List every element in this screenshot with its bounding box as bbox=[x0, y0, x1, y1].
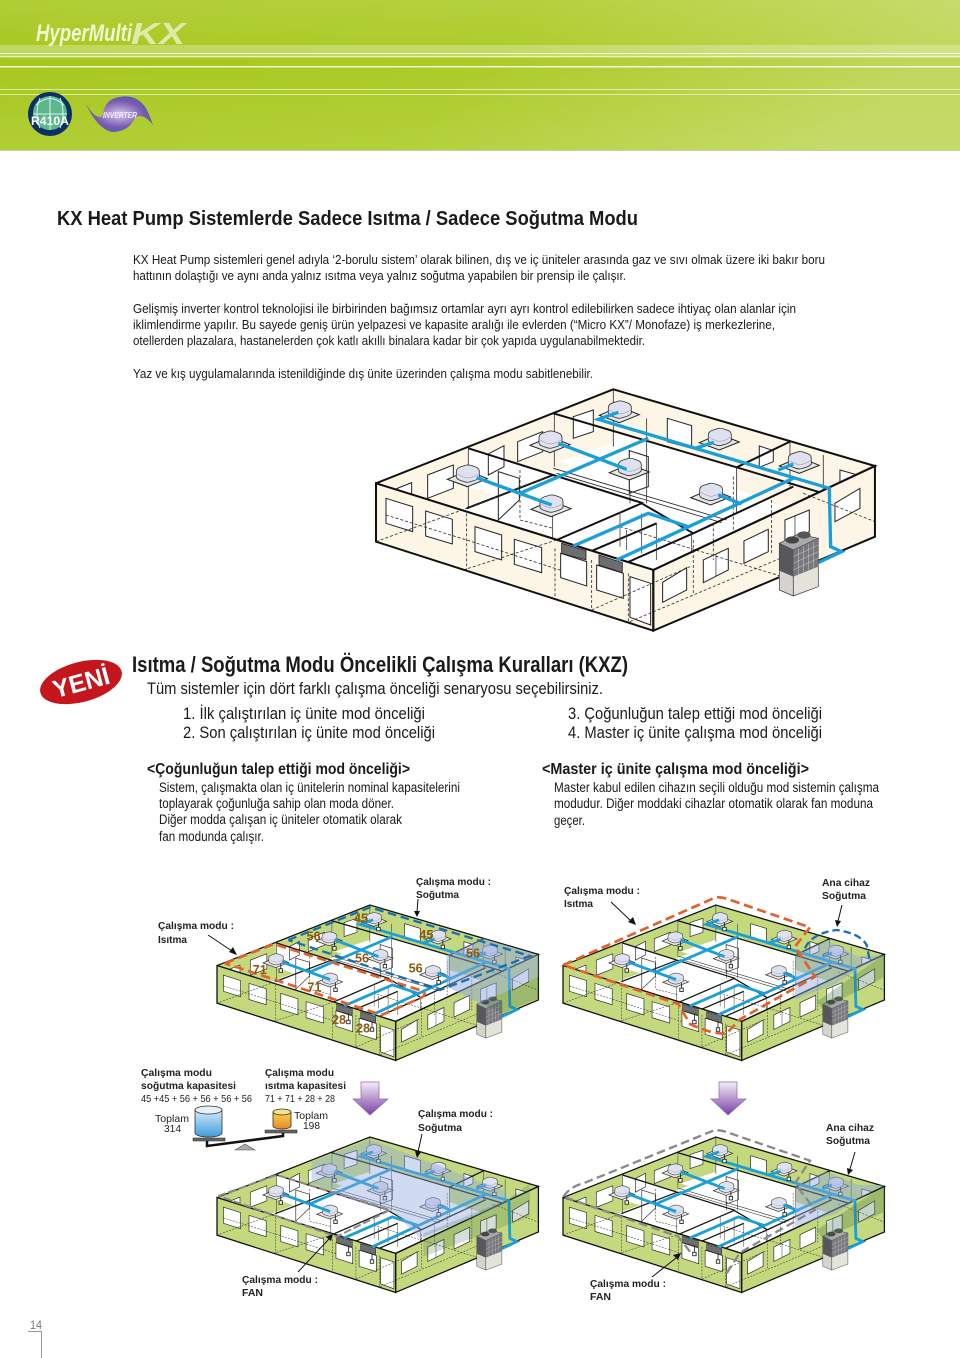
label: cooling mode top: Soğutma bbox=[416, 889, 459, 901]
text block: majority priority: toplayarak çoğunluğa sahip olan moda döner. bbox=[159, 796, 394, 811]
intro text: otellerden plazalara, hastanelerden çok katlı akıllı binalara kadar bir çok yapıda uygulanabilmektedir. bbox=[133, 333, 645, 348]
intro text: Yaz ve kış uygulamalarında istenildiğinde dış ünite üzerinden çalışma modu sabitlenebilir. bbox=[133, 366, 593, 381]
label: heating mode right: Çalışma modu : bbox=[564, 885, 640, 897]
label: master cooling bottom: Soğutma bbox=[826, 1135, 870, 1147]
intro text: iklimlendirme yapılır. Bu sayede geniş ürün yelpazesi ve kapasite aralığı ile evlerden (“Micro KX”/ Monofaze) iş merkezlerine, bbox=[133, 317, 775, 332]
logo: HyperMulti KX: KX bbox=[131, 16, 188, 51]
cooling total: 314 bbox=[164, 1123, 181, 1135]
diagram: capacities building bbox=[217, 905, 538, 1060]
label: fan mode right: FAN bbox=[590, 1291, 611, 1303]
title: KX Heat Pump Sistemlerde Sadece Isıtma / Sadece Soğutma Modu bbox=[57, 208, 638, 230]
label: master cooling bottom bbox=[826, 1122, 874, 1175]
section heading: Isıtma / Soğutma Modu Öncelikli Çalışma Kuralları (KXZ) bbox=[132, 652, 628, 677]
heating capacity text: 71 + 71 + 28 + 28 bbox=[265, 1093, 335, 1105]
cooling capacity text: soğutma kapasitesi bbox=[141, 1080, 236, 1092]
capacity numbers: 56 bbox=[466, 946, 480, 960]
scale bbox=[193, 1106, 297, 1150]
icon: inverter swoosh: INVERTER bbox=[103, 110, 138, 120]
diagram: master building bbox=[563, 897, 885, 1060]
cooling capacity text: Çalışma modu bbox=[141, 1067, 212, 1079]
cooling total: Toplam bbox=[155, 1113, 189, 1125]
label: master cooling top: Soğutma bbox=[822, 890, 866, 902]
capacity numbers: 71 bbox=[307, 980, 321, 994]
label: heating mode left bbox=[158, 920, 237, 955]
heating total: 198 bbox=[303, 1120, 320, 1132]
capacity numbers: 56 bbox=[355, 951, 369, 965]
priority list: 2. Son çalıştırılan iç ünite mod önceliği bbox=[183, 724, 435, 742]
capacity numbers: 28 bbox=[332, 1013, 346, 1027]
label: fan mode left: Çalışma modu : bbox=[242, 1274, 318, 1286]
label: master cooling top: Ana cihaz bbox=[822, 877, 870, 889]
capacity numbers: 45 bbox=[354, 911, 368, 925]
cooling capacity text: 45 +45 + 56 + 56 + 56 + 56 bbox=[141, 1093, 252, 1105]
icon: inverter swoosh bbox=[86, 96, 153, 132]
icon: R410A globe: R410A bbox=[31, 116, 69, 128]
capacity numbers: 71 bbox=[253, 963, 267, 977]
diagram: fan result building bbox=[217, 1137, 538, 1292]
label: heating mode right bbox=[564, 885, 640, 925]
icon: R410A globe bbox=[28, 92, 72, 136]
logo: HyperMulti KX bbox=[36, 16, 188, 51]
text block: majority priority: Sistem, çalışmakta olan iç ünitelerin nominal kapasitelerini bbox=[159, 780, 460, 795]
label: cooling mode top: Çalışma modu : bbox=[416, 876, 491, 888]
priority list: 1. İlk çalıştırılan iç ünite mod önceliği bbox=[183, 704, 425, 723]
capacity numbers: 45 bbox=[419, 928, 433, 942]
page number: 14 bbox=[30, 1320, 43, 1332]
intro text: KX Heat Pump sistemleri genel adıyla ‘2-borulu sistem’ olarak bilinen, dış ve iç üniteler arasında gaz ve sıvı olmak üzere iki bakır boru bbox=[133, 252, 825, 267]
arrow: purple down left bbox=[353, 1082, 388, 1115]
capacity numbers: 28 bbox=[356, 1022, 370, 1036]
text block: master priority: geçer. bbox=[554, 813, 585, 828]
intro text bbox=[133, 252, 825, 381]
label: fan mode right bbox=[590, 1253, 681, 1303]
heating capacity text bbox=[265, 1067, 346, 1105]
cooling total bbox=[155, 1113, 189, 1135]
label: heating mode right: Isıtma bbox=[564, 898, 593, 910]
text block: majority priority bbox=[147, 761, 460, 844]
label: fan mode left: FAN bbox=[242, 1287, 263, 1299]
text block: master priority bbox=[542, 761, 879, 828]
diagram: master fan result building bbox=[563, 1130, 885, 1292]
text block: master priority: Master kabul edilen cihazın seçili olduğu mod sistemin çalışma bbox=[554, 780, 879, 795]
label: heating mode left: Isıtma bbox=[158, 934, 187, 946]
label: cooling mode bottom: Soğutma bbox=[418, 1122, 462, 1134]
priority list: 3. Çoğunluğun talep ettiği mod önceliği bbox=[568, 705, 822, 723]
page number bbox=[28, 1320, 43, 1358]
intro text: Gelişmiş inverter kontrol teknolojisi ile birbirinden bağımsız ortamlar ayrı ayrı kontrol edilebilirken sadece ihtiyaç olan alanlar için bbox=[133, 301, 796, 316]
header banner bbox=[0, 0, 960, 151]
label: fan mode left bbox=[242, 1234, 333, 1299]
label: cooling mode bottom bbox=[415, 1108, 493, 1158]
text block: majority priority: fan modunda çalışır. bbox=[159, 829, 264, 844]
label: fan mode right: Çalışma modu : bbox=[590, 1278, 666, 1290]
capacity numbers bbox=[253, 911, 480, 1036]
priority list bbox=[183, 704, 822, 742]
label: master cooling top bbox=[822, 877, 870, 927]
text block: master priority: modudur. Diğer moddaki cihazlar otomatik olarak fan moduna bbox=[554, 796, 873, 811]
priority list: 4. Master iç ünite çalışma mod önceliği bbox=[568, 724, 822, 742]
logo: HyperMulti KX: HyperMulti bbox=[36, 20, 133, 47]
heating capacity text: ısıtma kapasitesi bbox=[265, 1080, 346, 1092]
badge: YENİ: YENİ bbox=[50, 662, 113, 704]
label: cooling mode bottom: Çalışma modu : bbox=[418, 1108, 493, 1120]
intro text: hattının dolaştığı ve aynı anda yalnız ısıtma veya yalnız soğutma yapabilen bir prensip ile çalışır. bbox=[133, 268, 626, 283]
text block: master priority: <Master iç ünite çalışma mod önceliği> bbox=[542, 761, 809, 778]
arrow: purple down right bbox=[711, 1082, 746, 1115]
capacity numbers: 56 bbox=[409, 961, 423, 975]
text block: majority priority: <Çoğunluğun talep ettiği mod önceliği> bbox=[147, 761, 410, 778]
main building illustration bbox=[376, 389, 875, 631]
badge: YENİ bbox=[35, 652, 127, 712]
cooling capacity text bbox=[141, 1067, 252, 1105]
balance: capacity comparison bbox=[141, 1067, 346, 1150]
capacity numbers: 56 bbox=[307, 930, 321, 944]
heating total: Toplam bbox=[294, 1110, 328, 1122]
heating capacity text: Çalışma modu bbox=[265, 1067, 334, 1079]
label: master cooling bottom: Ana cihaz bbox=[826, 1122, 874, 1134]
text block: majority priority: Diğer modda çalışan iç üniteler otomatik olarak bbox=[159, 812, 402, 827]
section intro: Tüm sistemler için dört farklı çalışma önceliği senaryosu seçebilirsiniz. bbox=[147, 680, 603, 698]
label: cooling mode top bbox=[414, 876, 491, 917]
label: heating mode left: Çalışma modu : bbox=[158, 920, 234, 932]
heating total bbox=[294, 1110, 328, 1132]
